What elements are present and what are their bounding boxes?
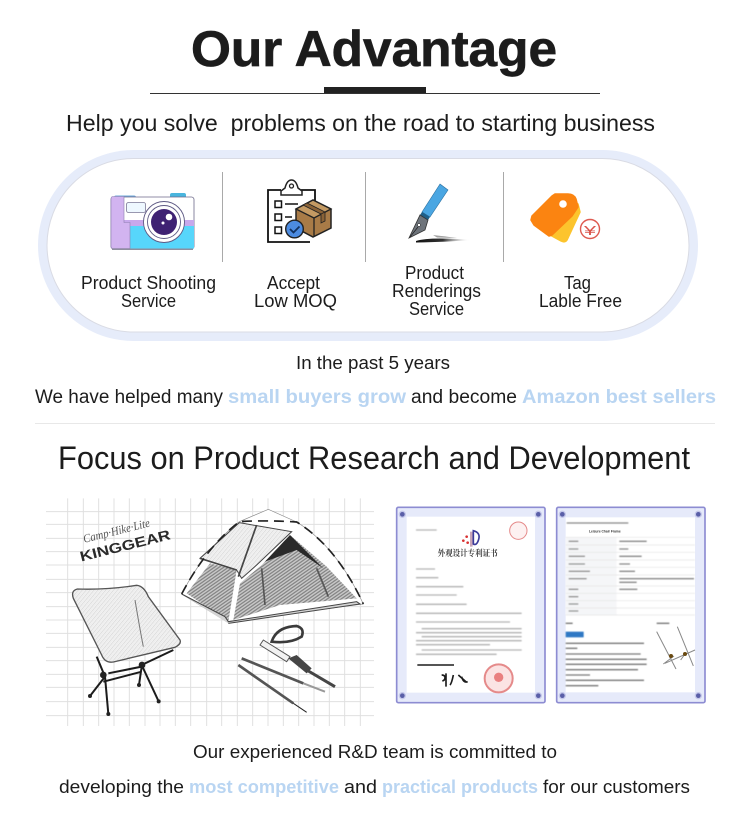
sketch: tent xyxy=(182,509,363,623)
label: tag lable free xyxy=(539,273,622,311)
certificate heading: 外观设计专利证书 xyxy=(438,547,498,559)
panel: patent certificate xyxy=(397,507,545,703)
listing bolts xyxy=(559,511,701,699)
text: past 5 years: In the past 5 years xyxy=(296,353,450,373)
panel: sketch of camping products xyxy=(46,498,374,726)
label: product renderings service xyxy=(392,263,481,319)
certificate body lines xyxy=(416,530,522,654)
icon: price tags xyxy=(531,194,600,242)
logo: Kinggear xyxy=(74,512,172,564)
icon: fountain pen xyxy=(409,184,470,242)
sketch: trekking poles xyxy=(238,626,335,712)
label: product renderings service: Renderings xyxy=(392,281,481,301)
text: R&D products statement: for our customers xyxy=(543,777,690,797)
label: accept low MOQ: Accept xyxy=(267,273,320,293)
certificate signature xyxy=(442,673,468,687)
listing table xyxy=(566,523,695,615)
label: product renderings service: Service xyxy=(409,299,464,319)
label: product renderings service: Product xyxy=(405,263,464,283)
heading: product research: Focus on Product Research and Development xyxy=(58,440,690,476)
listing technical drawing xyxy=(657,627,695,669)
label: accept low MOQ: Low MOQ xyxy=(254,291,337,311)
icon: camera xyxy=(111,193,194,250)
logo: Kinggear: Camp·Hike·Lite xyxy=(82,516,152,546)
label: accept low MOQ xyxy=(254,273,337,311)
text: buyers statement xyxy=(35,387,716,408)
title: Our Advantage xyxy=(191,21,557,77)
text: R&D products statement: and xyxy=(344,777,377,797)
icon: price tags: ¥ xyxy=(582,223,597,238)
icon: checklist and box xyxy=(268,180,331,242)
label: product shooting service: Product Shooting xyxy=(81,273,216,293)
panel: services pill xyxy=(38,150,698,341)
listing abstract xyxy=(566,623,669,686)
subtitle: Help you solve problems on the road to starting business xyxy=(66,110,655,136)
text: R&D products statement: practical products xyxy=(382,777,538,797)
label: tag lable free: Tag xyxy=(564,273,591,293)
panel: patent listing xyxy=(557,507,705,703)
text: buyers statement: and become xyxy=(411,387,517,408)
label: tag lable free: Lable Free xyxy=(539,291,622,311)
certificate barcode xyxy=(417,664,454,666)
certificate logo xyxy=(462,531,479,547)
certificate seals xyxy=(485,522,527,692)
logo: Kinggear: KINGGEAR xyxy=(78,526,172,564)
text: R&D commitment: Our experienced R&D team is committed to xyxy=(193,742,557,762)
label: product shooting service xyxy=(81,273,216,311)
text: R&D products statement: developing the xyxy=(59,777,184,797)
label: product shooting service: Service xyxy=(121,291,176,311)
text: buyers statement: small buyers grow xyxy=(228,387,406,408)
text: buyers statement: Amazon best sellers xyxy=(522,387,716,408)
sketch: folding chair xyxy=(73,585,180,716)
certificate bolts xyxy=(399,511,541,699)
listing title: Leisure Chair Frame xyxy=(589,528,621,533)
title underline xyxy=(150,87,600,94)
text: R&D products statement: most competitive xyxy=(189,777,339,797)
text: R&D products statement xyxy=(59,777,690,797)
text: buyers statement: We have helped many xyxy=(35,387,223,408)
